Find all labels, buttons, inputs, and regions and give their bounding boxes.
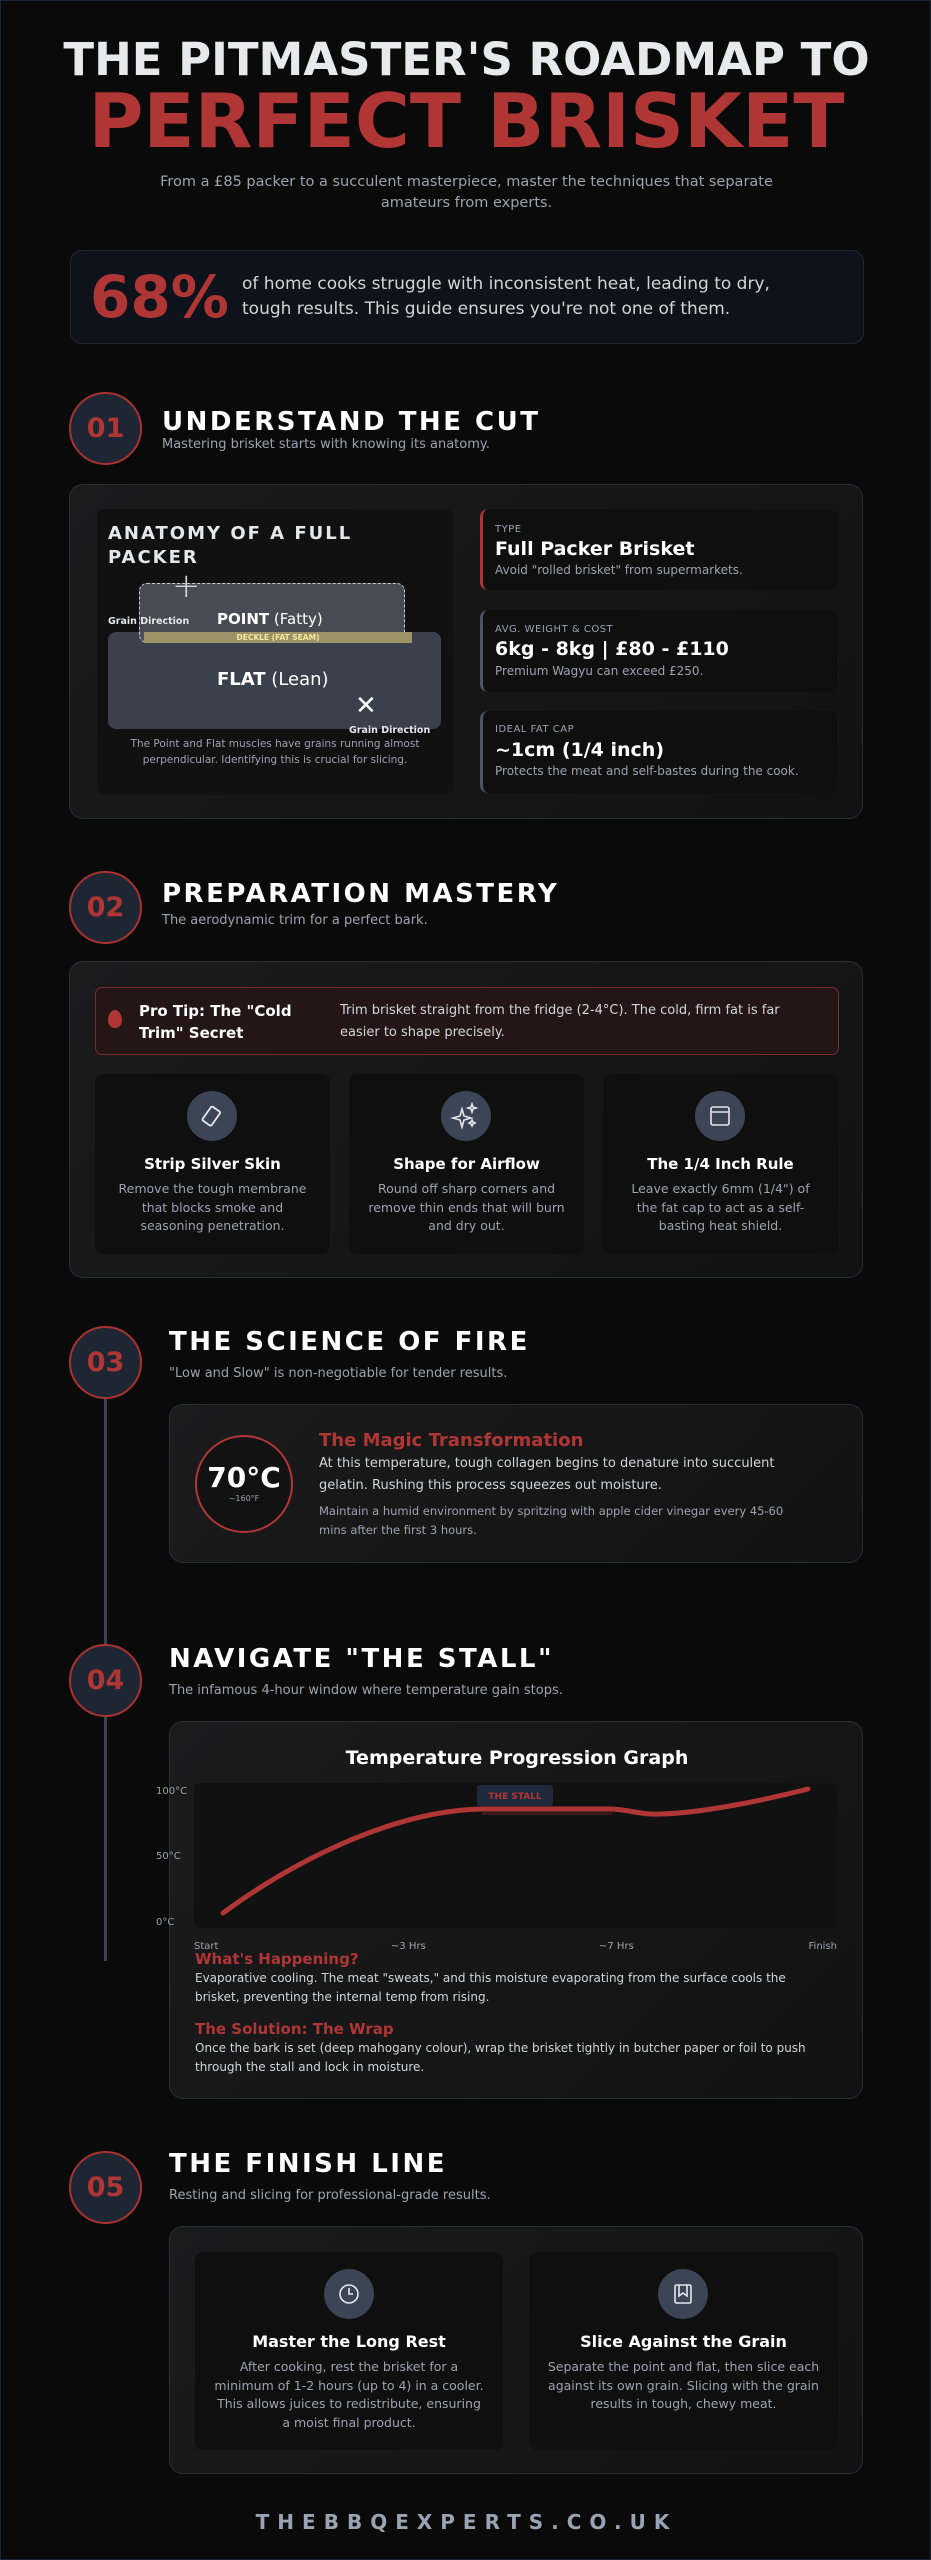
card: long rest: minimum of 1-2 hours (up to 4) in a cooler. xyxy=(214,2378,484,2392)
step circle 04 xyxy=(69,1644,142,1717)
card: shape for airflow: Shape for Airflow xyxy=(393,1155,540,1173)
heading: UNDERSTAND THE CUT xyxy=(162,407,540,437)
anatomy heading: PACKER xyxy=(108,547,199,568)
panel: the stall xyxy=(169,1721,863,2099)
fact card: weight & cost: AVG. WEIGHT & COST xyxy=(495,624,613,635)
fact card: fat cap xyxy=(480,711,837,793)
fact card: weight & cost xyxy=(480,610,837,692)
card: shape for airflow xyxy=(349,1074,584,1254)
x axis labels xyxy=(194,1941,837,1952)
card: long rest: a moist final product. xyxy=(282,2414,416,2430)
y axis labels: 50°C xyxy=(156,1851,181,1862)
fact card: fat cap: ~1cm (1/4 inch) xyxy=(495,739,664,761)
caption: The Point and Flat muscles have grains running almost xyxy=(131,738,419,750)
subtitle xyxy=(160,174,773,211)
tip text xyxy=(340,1003,780,1040)
stall label xyxy=(477,1785,553,1806)
heading: THE SCIENCE OF FIRE xyxy=(169,1327,530,1357)
step circle 02: 02 xyxy=(87,892,124,923)
temperature badge: ~160°F xyxy=(229,1494,259,1503)
heading: THE FINISH LINE xyxy=(169,2149,447,2179)
temperature chart xyxy=(156,1783,837,1952)
what's happening text: brisket, preventing the internal temp from rising. xyxy=(195,1990,489,2004)
card: long rest: This allows juices to redistribute, ensuring xyxy=(217,2396,481,2411)
title: THE PITMASTER'S ROADMAP TO xyxy=(63,33,870,86)
chart plot area xyxy=(194,1783,837,1928)
stat number: 68% xyxy=(90,263,229,331)
body text: gelatin. Rushing this process squeezes out moisture. xyxy=(319,1478,662,1493)
card: slice against grain: Separate the point and flat, then slice each xyxy=(548,2359,819,2374)
panel: understand the cut xyxy=(69,484,863,819)
heading: NAVIGATE "THE STALL" xyxy=(169,1644,554,1674)
caption xyxy=(130,738,420,766)
tip title xyxy=(139,1002,292,1042)
body text xyxy=(319,1456,775,1493)
card: slice against grain: against its own grain. Slicing with the grain xyxy=(548,2378,819,2392)
body text: At this temperature, tough collagen begins to denature into succulent xyxy=(319,1456,775,1471)
card: long rest: Master the Long Rest xyxy=(252,2332,446,2351)
card: strip silver skin: Remove the tough membrane xyxy=(119,1181,306,1196)
fact card: weight & cost: 6kg - 8kg | £80 - £110 xyxy=(495,638,729,660)
grain label point: Grain Direction xyxy=(108,616,189,627)
stall label: THE STALL xyxy=(488,1792,542,1802)
card: shape for airflow: Round off sharp corners and xyxy=(378,1181,555,1196)
fact card: type xyxy=(480,509,837,590)
step circle 05: 05 xyxy=(87,2172,124,2203)
subtitle: amateurs from experts. xyxy=(381,195,552,211)
subheading: Mastering brisket starts with knowing its anatomy. xyxy=(162,437,490,452)
icon: book xyxy=(658,2269,708,2319)
card: quarter inch rule: basting heat shield. xyxy=(659,1218,782,1233)
y axis labels: 0°C xyxy=(156,1917,174,1928)
icon: sparkles xyxy=(441,1091,491,1141)
card: long rest: After cooking, rest the brisket for a xyxy=(240,2359,458,2374)
step circle 04: 04 xyxy=(87,1665,124,1696)
card: quarter inch rule: The 1/4 Inch Rule xyxy=(647,1155,794,1173)
temperature curve xyxy=(223,1789,808,1913)
flat label: FLAT (Lean) xyxy=(217,669,329,690)
anatomy diagram card xyxy=(97,509,453,795)
card: strip silver skin: Strip Silver Skin xyxy=(144,1155,281,1173)
card: strip silver skin xyxy=(95,1074,330,1254)
x axis labels: Finish xyxy=(809,1941,837,1952)
anatomy heading xyxy=(108,523,352,568)
x axis labels: ~3 Hrs xyxy=(391,1941,426,1952)
point label: POINT (Fatty) xyxy=(217,610,323,628)
card: strip silver skin: seasoning penetration. xyxy=(140,1218,285,1233)
title: PERFECT BRISKET xyxy=(88,77,845,165)
card: long rest xyxy=(195,2252,503,2450)
solution heading: The Solution: The Wrap xyxy=(195,2020,394,2038)
stat text xyxy=(242,274,770,319)
icon: clock xyxy=(324,2269,374,2319)
caption: perpendicular. Identifying this is crucial for slicing. xyxy=(143,754,407,766)
card: shape for airflow: remove thin ends that will burn xyxy=(368,1200,565,1214)
panel: finish line xyxy=(169,2226,863,2474)
subtitle: From a £85 packer to a succulent masterpiece, master the techniques that separate xyxy=(160,174,773,190)
tip text: Trim brisket straight from the fridge (2-4°C). The cold, firm fat is far xyxy=(340,1003,780,1018)
what's happening text: Evaporative cooling. The meat "sweats," and this moisture evaporating from the surface cools the xyxy=(195,1971,786,1985)
fact card: fat cap: Protects the meat and self-bastes during the cook. xyxy=(495,764,799,778)
card: strip silver skin: that blocks smoke and xyxy=(142,1200,283,1214)
card: slice against grain: results in tough, chewy meat. xyxy=(590,2396,776,2411)
subheading: Resting and slicing for professional-grade results. xyxy=(169,2188,491,2203)
what's happening heading: What's Happening? xyxy=(195,1950,359,1968)
step circle 01: 01 xyxy=(87,413,124,444)
anatomy heading: ANATOMY OF A FULL xyxy=(108,523,352,544)
heading: PREPARATION MASTERY xyxy=(162,879,559,909)
icon: diamond xyxy=(187,1091,237,1141)
step circle 03: 03 xyxy=(87,1347,124,1378)
grain direction icon: x: ✕ xyxy=(355,691,377,721)
section 01 header xyxy=(69,392,540,465)
x axis labels: ~7 Hrs xyxy=(599,1941,634,1952)
spritz note: mins after the first 3 hours. xyxy=(319,1523,477,1537)
fact card: type: Avoid "rolled brisket" from supermarkets. xyxy=(495,563,743,577)
footer: THEBBQEXPERTS.CO.UK xyxy=(256,2510,677,2534)
point muscle xyxy=(139,583,405,643)
graph title: Temperature Progression Graph xyxy=(346,1747,688,1769)
pro tip callout xyxy=(95,987,839,1055)
y axis labels: 100°C xyxy=(156,1786,187,1797)
tip title: Trim" Secret xyxy=(139,1024,243,1042)
stat text: of home cooks struggle with inconsistent heat, leading to dry, xyxy=(242,274,770,294)
panel: preparation xyxy=(69,961,863,1278)
step circle 03 xyxy=(69,1326,142,1399)
solution text: Once the bark is set (deep mahogany colour), wrap the brisket tightly in butcher paper or foil to push xyxy=(195,2041,806,2055)
stat callout xyxy=(70,250,864,344)
magic transformation heading: The Magic Transformation xyxy=(319,1430,583,1451)
title xyxy=(63,33,870,165)
section 03 header xyxy=(69,1326,530,1399)
card: quarter inch rule: Leave exactly 6mm (1/4") of xyxy=(631,1181,810,1196)
flat muscle xyxy=(108,632,441,729)
card: slice against grain: Slice Against the Grain xyxy=(580,2332,787,2351)
what's happening text xyxy=(195,1971,786,2004)
step circle 01 xyxy=(69,392,142,465)
card: quarter inch rule: the fat cap to act as a self- xyxy=(637,1200,804,1214)
subheading: The aerodynamic trim for a perfect bark. xyxy=(162,913,428,928)
fact card: fat cap: IDEAL FAT CAP xyxy=(495,724,574,735)
fact card: type: Full Packer Brisket xyxy=(495,538,694,560)
section 02 header xyxy=(69,871,559,944)
spritz note: Maintain a humid environment by spritzing with apple cider vinegar every 45-60 xyxy=(319,1504,783,1518)
step circle 05 xyxy=(69,2151,142,2224)
panel: science of fire xyxy=(169,1404,863,1563)
deckle fat seam xyxy=(144,632,412,643)
solution text: through the stall and lock in moisture. xyxy=(195,2060,424,2074)
icon: fire xyxy=(108,1010,122,1028)
tip title: Pro Tip: The "Cold xyxy=(139,1002,292,1020)
stat text: tough results. This guide ensures you're not one of them. xyxy=(242,299,730,319)
section 05 header xyxy=(69,2149,491,2224)
timeline line xyxy=(104,1397,107,1961)
card: quarter inch rule xyxy=(603,1074,838,1254)
fact card: weight & cost: Premium Wagyu can exceed £250. xyxy=(495,664,703,678)
icon: window xyxy=(695,1091,745,1141)
temperature badge: 70°C xyxy=(207,1461,281,1494)
solution text xyxy=(195,2041,806,2074)
grain direction icon: plus: + xyxy=(172,566,200,606)
section 04 header xyxy=(69,1644,563,1717)
spritz note xyxy=(319,1504,783,1537)
grain label flat: Grain Direction xyxy=(349,725,430,736)
card: slice against grain xyxy=(529,2252,838,2450)
stall band xyxy=(482,1812,612,1815)
step circle 02 xyxy=(69,871,142,944)
y axis labels xyxy=(156,1786,187,1928)
tip text: easier to shape precisely. xyxy=(340,1025,505,1040)
temperature badge xyxy=(195,1435,293,1533)
subheading: The infamous 4-hour window where temperature gain stops. xyxy=(169,1683,563,1698)
subheading: "Low and Slow" is non-negotiable for tender results. xyxy=(169,1366,507,1381)
deckle fat seam: DECKLE (FAT SEAM) xyxy=(236,633,320,642)
fact card: type: TYPE xyxy=(495,524,522,535)
x axis labels: Start xyxy=(194,1941,219,1952)
card: shape for airflow: and dry out. xyxy=(428,1218,505,1233)
